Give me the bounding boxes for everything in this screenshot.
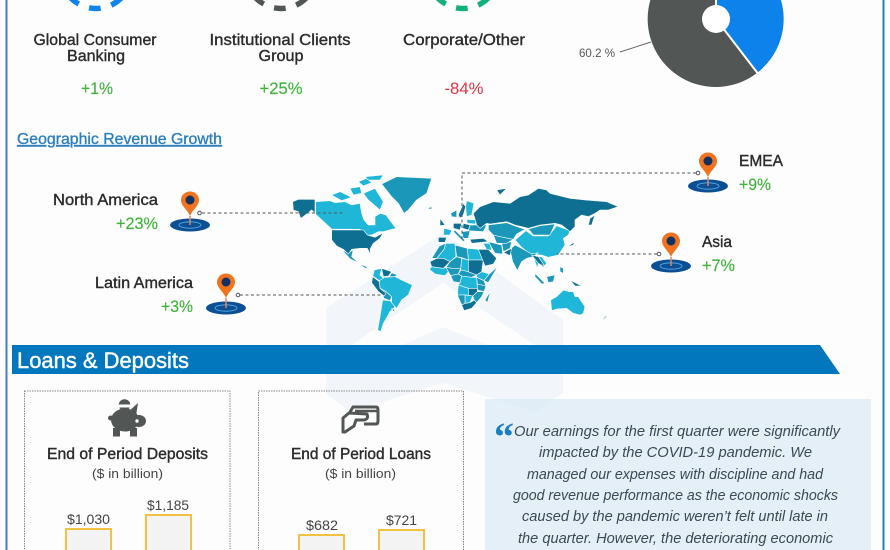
region: EMEA: +9% [739,176,771,194]
bar chart: $1,030 [67,511,110,527]
heading: End of Period Deposits [47,446,208,463]
pin icon [206,274,246,314]
quote text: managed our expenses with discipline and had [527,466,824,483]
segment: Corporate/Other [403,0,526,98]
section banner: Loans & Deposits [12,345,840,374]
donut: green [428,0,498,8]
region: Asia [651,232,735,275]
bar chart: $682 [306,517,338,533]
region: North America: +23% [116,215,158,233]
region: North America [53,192,210,233]
region: Asia: Asia [702,234,732,251]
quote text: Our earnings for the first quarter were significantly [514,423,841,440]
outer frame right [882,0,884,550]
icon: quotation mark: “ [494,414,514,459]
pie chart [579,0,784,87]
quote text: caused by the pandemic weren’t felt until late in [522,508,828,525]
panel: CEO quote [485,399,871,550]
region: Latin America: Latin America [95,275,193,292]
bar chart: $721 [386,512,417,528]
section banner: Loans & Deposits: Loans & Deposits [17,348,189,373]
subheading: ($ in billion) [92,466,163,481]
icon: piggy bank [108,399,146,436]
heading: Geographic Revenue Growth: Geographic Revenue Growth [17,131,222,148]
heading: End of Period Loans [291,446,431,463]
outer frame left [6,0,8,550]
region: EMEA: EMEA [739,153,784,170]
donut: grey [246,0,316,8]
label: Banking [67,48,125,65]
quote text: the quarter. However, the deteriorating economic [518,530,833,547]
region: Latin America [95,274,246,316]
pin icon [688,152,728,192]
label [210,32,350,65]
pin icon [170,192,210,232]
segment: Global Consumer Banking [34,0,157,98]
region: EMEA [688,152,784,194]
label: Global Consumer [34,32,157,49]
pin icon [651,232,691,272]
donut: blue [60,0,132,8]
region: Latin America: +3% [161,298,193,316]
icon: hand with card [343,407,378,432]
region: North America: North America [53,192,158,209]
world map [293,175,618,332]
label: Corporate/Other [403,32,526,49]
bar chart: $1,185 [147,497,189,513]
label: Group [258,48,304,65]
quote text [513,423,841,547]
label [34,32,157,65]
value: -84% [444,80,484,98]
quote text: good revenue performance as the economic shocks [513,487,838,504]
segment: Institutional Clients Group [210,0,350,98]
background watermark [326,233,563,412]
panel: End of Period Loans [258,391,464,550]
subheading: ($ in billion) [325,466,396,481]
quote text: impacted by the COVID-19 pandemic. We [539,444,812,461]
pie chart: 60.2 % [579,48,615,60]
value: +1% [81,80,113,98]
bar chart [66,497,191,550]
connector lines [202,173,696,295]
label: Institutional Clients [210,32,350,49]
bar chart [299,512,424,550]
value: +25% [260,80,303,98]
region: Asia: +7% [702,257,735,275]
panel: End of Period Deposits [24,391,230,550]
